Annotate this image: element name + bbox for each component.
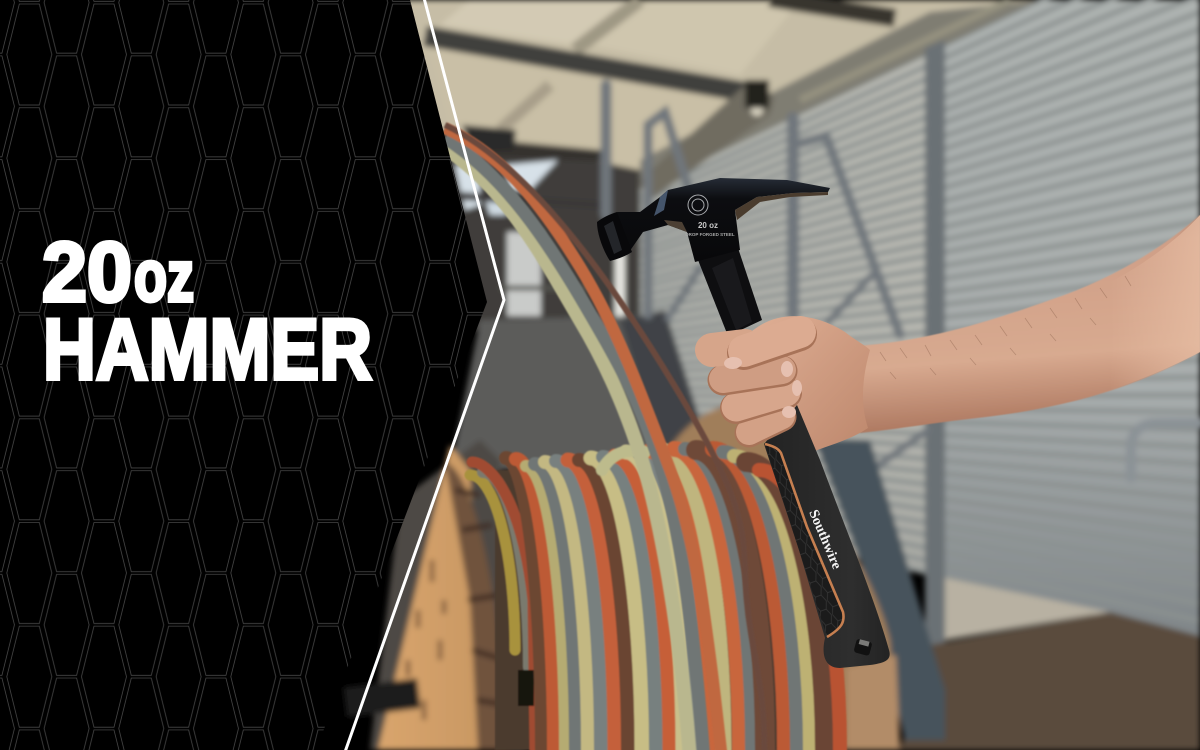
loose cables rising from spool (445, 125, 765, 750)
wrist-end highlight (1110, 215, 1200, 390)
brand text: Southwire (805, 508, 844, 572)
hammer head (597, 178, 830, 262)
left spool wood face (343, 440, 525, 750)
wall column (925, 40, 945, 740)
head logo (688, 195, 708, 215)
dark interior (440, 80, 775, 330)
ceiling (400, 0, 1200, 330)
black panel with hexagon pattern (0, 0, 487, 750)
title unit: oz (134, 237, 194, 317)
dark steel post behind spool (815, 440, 945, 740)
white chevron line (345, 0, 504, 750)
hammer shank (698, 245, 762, 336)
fingernails (724, 356, 802, 418)
hammer (597, 178, 890, 668)
index finger (712, 346, 745, 350)
palm (745, 316, 870, 452)
right spool flange (672, 405, 900, 750)
corrugated wall (640, 0, 1200, 640)
floor (900, 578, 1200, 750)
middle finger (723, 370, 782, 380)
ring finger (736, 392, 786, 408)
forearm (855, 215, 1200, 433)
cable spool coil (470, 449, 846, 750)
concrete wall (450, 315, 690, 470)
fingers gripping handle (712, 332, 802, 433)
lanyard hole (853, 638, 873, 656)
steel frames (606, 85, 928, 470)
rubber grip handle (764, 405, 890, 668)
head size marking: 20 oz (698, 221, 718, 230)
title word: HAMMER (43, 302, 372, 398)
wall pipe (1131, 423, 1200, 478)
photo background: warehouse (343, 0, 1200, 750)
title number: 20 (42, 225, 132, 319)
little finger (749, 416, 782, 433)
arm hair (880, 276, 1131, 379)
head steel marking: DROP FORGED STEEL (685, 232, 735, 237)
poll face (597, 212, 632, 261)
grip inlay (765, 444, 844, 637)
thumb (744, 332, 800, 353)
title (42, 225, 372, 398)
pale cable loop (602, 451, 645, 470)
